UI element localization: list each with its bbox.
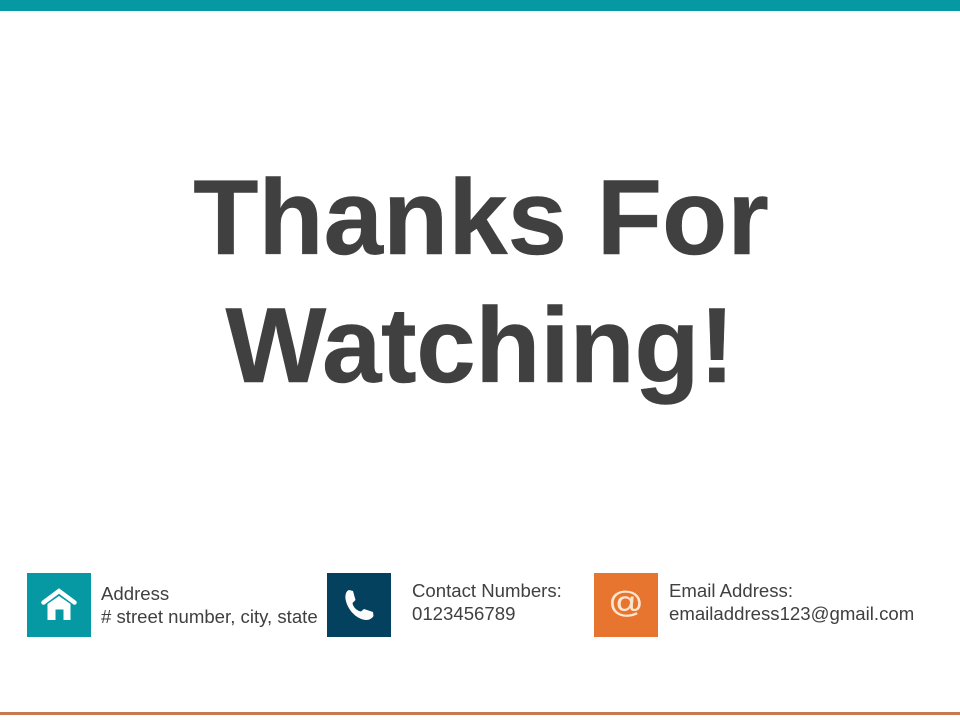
address text: Address: [101, 583, 169, 604]
panel: email address: [594, 573, 914, 637]
contact text: 0123456789: [412, 603, 515, 624]
panel: address: [27, 573, 318, 637]
icon: at sign: [594, 573, 658, 637]
title: [193, 157, 769, 405]
email text: Email Address:: [669, 580, 793, 601]
panel: contact numbers: [327, 573, 562, 637]
icon: phone: [327, 573, 391, 637]
top teal bar: [0, 0, 960, 11]
title: Watching!: [226, 285, 734, 405]
address text: # street number, city, state: [101, 606, 318, 627]
bottom orange line: [0, 712, 960, 715]
icon: at sign: @: [605, 586, 646, 619]
email text: [669, 580, 914, 624]
icon: house: [27, 573, 91, 637]
contact text: [412, 580, 562, 624]
title: Thanks For: [193, 157, 769, 277]
contact text: Contact Numbers:: [412, 580, 562, 601]
address text: [101, 583, 318, 627]
email text: emailaddress123@gmail.com: [669, 603, 914, 624]
